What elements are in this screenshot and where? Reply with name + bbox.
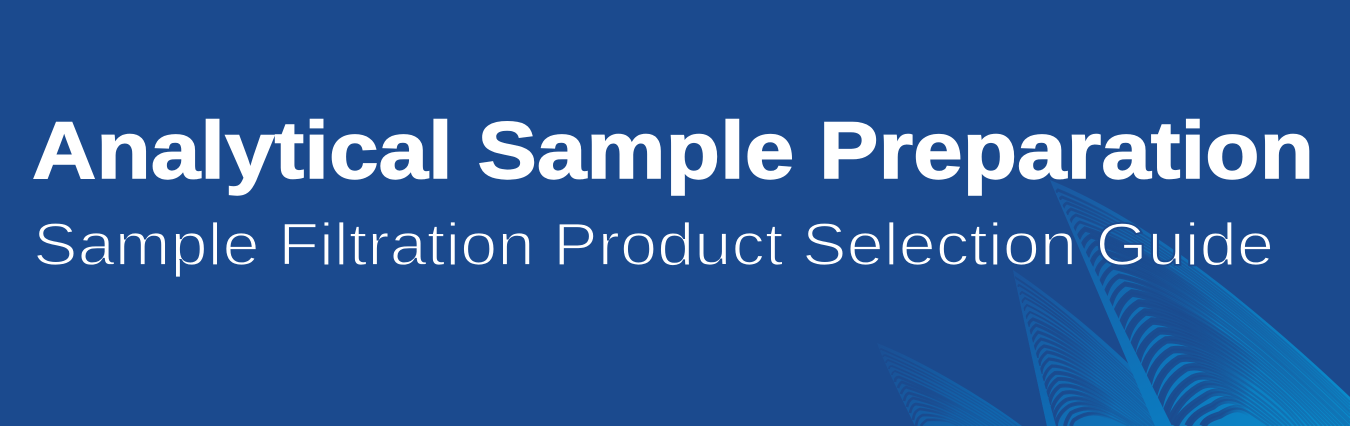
decorative petal: small left [884,349,1022,426]
title: Analytical Sample Preparation [32,106,1314,196]
decorative petal: large right [1050,180,1350,426]
subtitle: Sample Filtration Product Selection Guide [33,211,1274,278]
decorative petal: middle [1013,270,1155,426]
